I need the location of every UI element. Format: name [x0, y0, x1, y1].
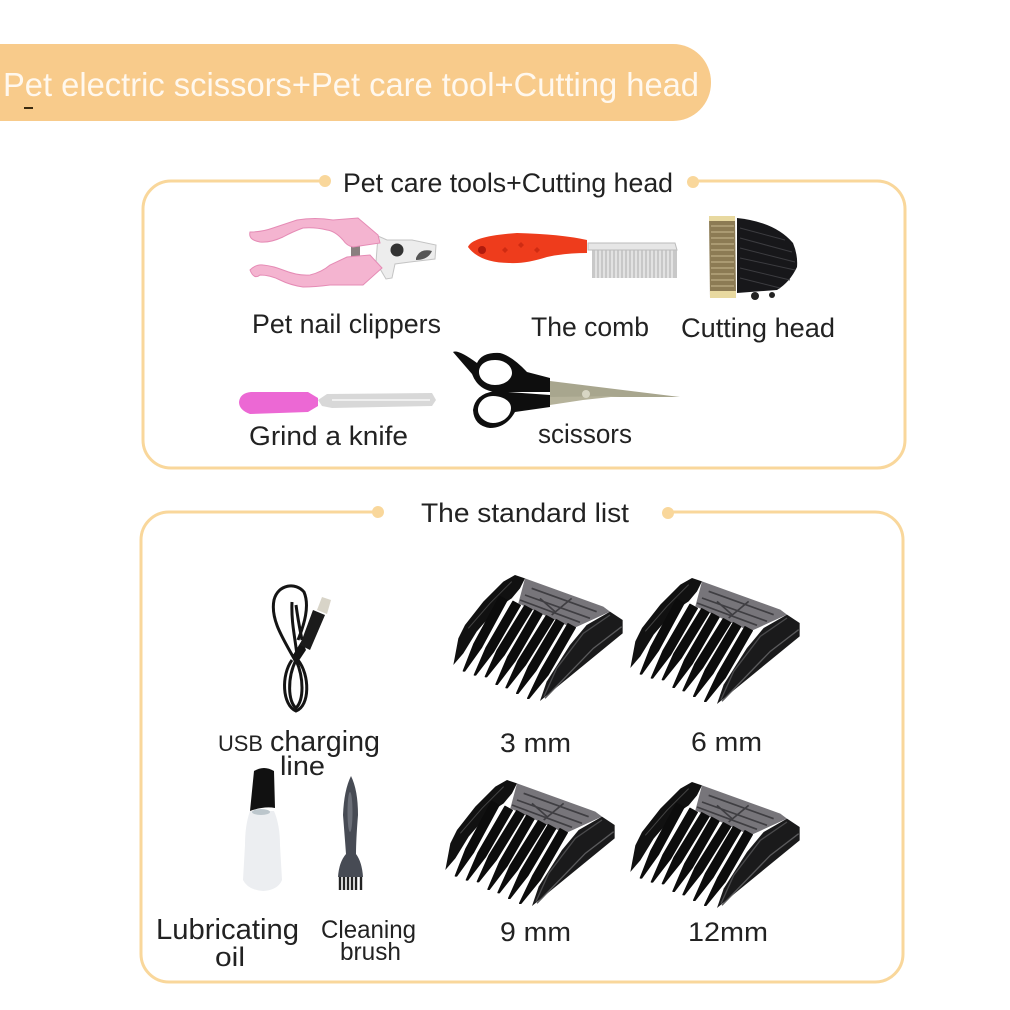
icon: 12 mm comb guard: [630, 782, 800, 908]
icon: 9 mm comb guard: [445, 780, 615, 906]
panel frame: pet care tools: [143, 175, 905, 468]
icon: lubricating oil bottle: [243, 768, 282, 891]
title banner: [0, 44, 711, 121]
icon: grinding file: [239, 392, 436, 414]
panel: pet care tools: [143, 168, 905, 468]
label: USB charging line: line: [280, 751, 325, 781]
label: comb: The comb: [531, 312, 649, 342]
label: lubricating oil: oil: [215, 942, 245, 972]
icon: USB cable: [273, 586, 331, 711]
label: cleaning brush: Cleaning: [321, 916, 416, 944]
label: cutting head: Cutting head: [681, 313, 835, 343]
label: 9 mm: 9 mm: [500, 917, 571, 947]
icon: cleaning brush: [338, 776, 363, 890]
icon: 3 mm comb guard: [453, 575, 623, 701]
heading: pet care tools: Pet care tools+Cutting head: [343, 168, 673, 198]
icon: pet nail clippers: [250, 218, 436, 287]
icon: scissors: [453, 351, 680, 428]
label: 12 mm: 12mm: [688, 917, 768, 947]
label: lubricating oil: [156, 914, 299, 972]
label: lubricating oil: Lubricating: [156, 914, 299, 946]
label: USB charging line: USB: [218, 731, 263, 756]
label: cleaning brush: brush: [340, 938, 401, 966]
panel: the standard list: [141, 498, 903, 982]
label: pet nail clippers: Pet nail clippers: [252, 309, 441, 339]
label: USB charging line: [218, 726, 380, 781]
panel frame: standard list: [141, 506, 903, 982]
label: grinding file: Grind a knife: [249, 421, 408, 451]
label: 6 mm: 6 mm: [691, 727, 762, 757]
label: USB charging line: charging: [270, 726, 380, 758]
label: cleaning brush: [321, 916, 416, 966]
heading: standard list: The standard list: [421, 498, 630, 528]
label: scissors: scissors: [538, 419, 632, 449]
icon: cutting head: [709, 216, 797, 300]
icon: 6 mm comb guard: [630, 578, 800, 704]
title banner: Pet electric scissors+Pet care tool+Cutting head: [3, 66, 699, 103]
label: 3 mm: 3 mm: [500, 728, 571, 758]
icon: comb: [468, 233, 677, 278]
